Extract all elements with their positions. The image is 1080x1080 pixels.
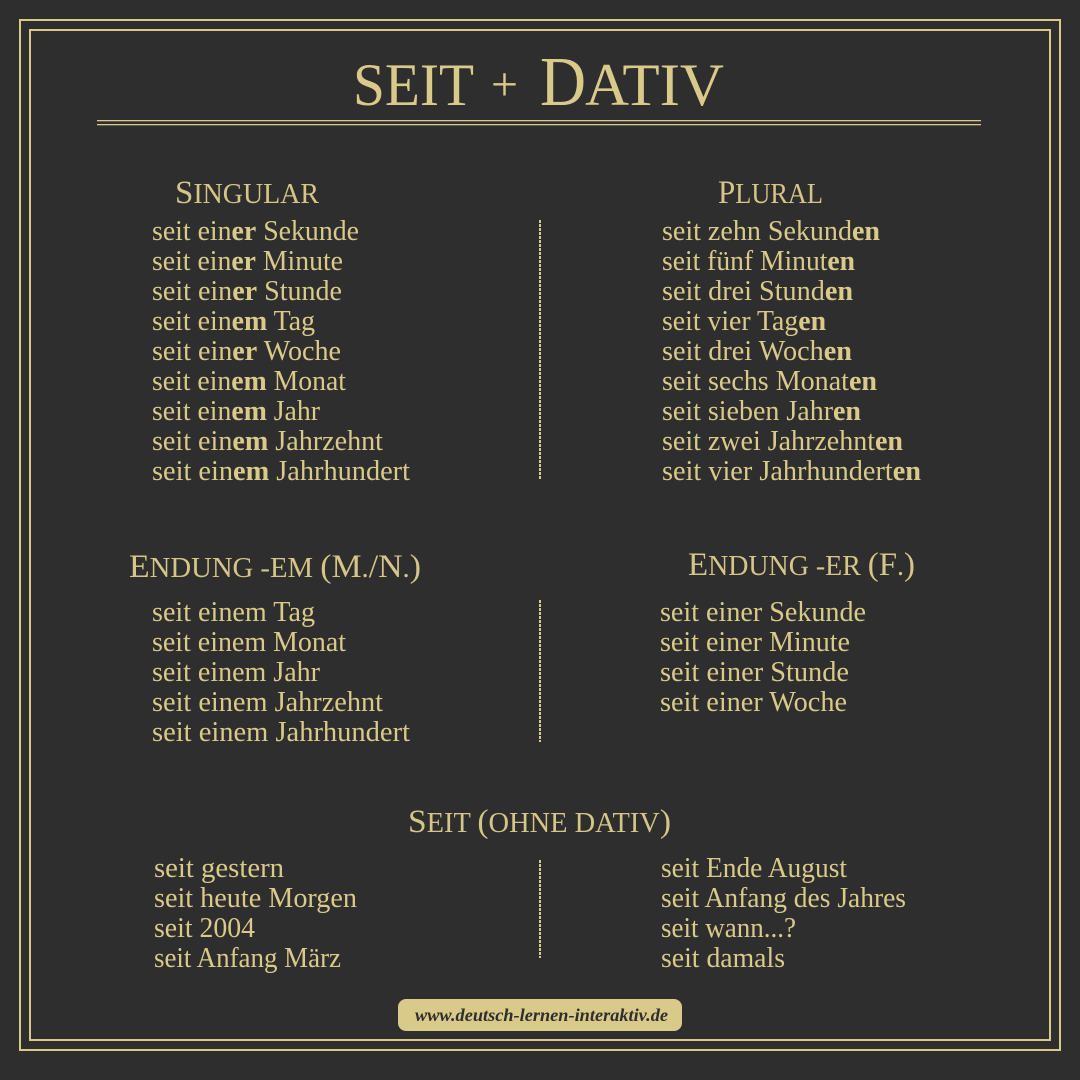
website badge: www.deutsch-lernen-interaktiv.de xyxy=(415,1005,668,1025)
list: ending -em forms: seit einem Jahrhundert xyxy=(152,717,410,748)
list: singular forms: seit einer Woche xyxy=(152,336,341,367)
list: singular forms: seit einem Jahr xyxy=(152,396,321,427)
list: plural forms: seit drei Stunden xyxy=(662,276,853,307)
list: ending -er forms: seit einer Woche xyxy=(660,687,847,718)
list: left expressions: seit 2004 xyxy=(154,913,255,944)
list: singular forms: seit einem Monat xyxy=(152,366,346,397)
list: ending -em forms: seit einem Jahrzehnt xyxy=(152,687,383,718)
panel: plural xyxy=(662,175,921,487)
title: ATIV xyxy=(585,52,724,118)
heading: plural: PLURAL xyxy=(718,175,823,211)
list: plural forms xyxy=(662,216,921,487)
list: ending -er forms: seit einer Stunde xyxy=(660,657,849,688)
panel: singular xyxy=(152,175,410,487)
heading: ending -er: ENDUNG -ER (F.) xyxy=(688,547,915,583)
title double rule xyxy=(97,120,981,125)
list: plural forms: seit fünf Minuten xyxy=(662,246,855,277)
heading: ending -em: ENDUNG -EM (M./N.) xyxy=(129,549,421,585)
list: plural forms: seit vier Jahrhunderten xyxy=(662,456,921,487)
list: plural forms: seit drei Wochen xyxy=(662,336,852,367)
divider: ending -em and -er xyxy=(539,600,541,742)
title: D xyxy=(540,44,586,121)
list: ending -er forms: seit einer Sekunde xyxy=(660,597,866,628)
list: left expressions: seit gestern xyxy=(154,853,284,884)
list: ending -em forms: seit einem Monat xyxy=(152,627,346,658)
list: ending -em forms: seit einem Tag xyxy=(152,597,315,628)
heading: seit without dative: SEIT (OHNE DATIV) xyxy=(408,804,671,840)
list: singular forms: seit einem Tag xyxy=(152,306,315,337)
list: singular forms: seit einer Sekunde xyxy=(152,216,359,247)
list: left expressions: seit heute Morgen xyxy=(154,883,357,914)
divider: without dative columns xyxy=(539,860,541,958)
list: singular forms: seit einem Jahrzehnt xyxy=(152,426,383,457)
list: right expressions: seit Ende August xyxy=(661,853,847,884)
list: singular forms: seit einem Jahrhundert xyxy=(152,456,410,487)
divider: singular and plural xyxy=(539,220,541,480)
list: plural forms: seit zehn Sekunden xyxy=(662,216,880,247)
list: singular forms: seit einer Stunde xyxy=(152,276,342,307)
list: right expressions xyxy=(661,853,906,974)
list: ending -er forms xyxy=(660,597,866,718)
title: SEIT xyxy=(353,52,474,118)
heading: singular: SINGULAR xyxy=(175,175,319,211)
panel: seit without dative xyxy=(154,804,906,974)
list: plural forms: seit sechs Monaten xyxy=(662,366,877,397)
list: ending -er forms: seit einer Minute xyxy=(660,627,850,658)
list: plural forms: seit zwei Jahrzehnten xyxy=(662,426,903,457)
list: plural forms: seit sieben Jahren xyxy=(662,396,861,427)
list: left expressions xyxy=(154,853,357,974)
list: singular forms xyxy=(152,216,410,487)
website badge xyxy=(398,999,682,1031)
list: ending -em forms: seit einem Jahr xyxy=(152,657,321,688)
list: right expressions: seit damals xyxy=(661,943,785,974)
title: + xyxy=(491,58,518,111)
list: right expressions: seit wann...? xyxy=(661,913,796,944)
title xyxy=(353,44,724,121)
list: plural forms: seit vier Tagen xyxy=(662,306,826,337)
panel: ending -em xyxy=(129,549,421,748)
panel: ending -er xyxy=(660,547,915,718)
list: right expressions: seit Anfang des Jahres xyxy=(661,883,906,914)
list: singular forms: seit einer Minute xyxy=(152,246,343,277)
list: left expressions: seit Anfang März xyxy=(154,943,341,974)
list: ending -em forms xyxy=(152,597,410,748)
